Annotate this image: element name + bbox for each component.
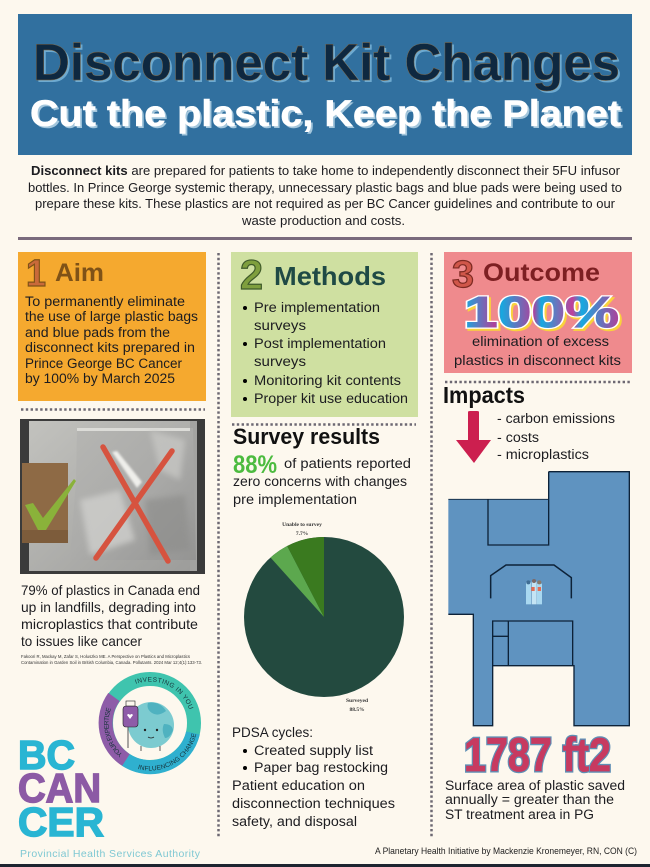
PDSA cycles: PDSA cycles:	[232, 725, 313, 740]
earth	[128, 702, 174, 751]
photo: paper bag and plastic bag	[20, 419, 205, 574]
aim text: the use of large plastic bags	[25, 309, 198, 324]
divider	[18, 237, 632, 240]
citation: Contamination in Garden Soil in British Columbia, Canada. Pollutants. 2024 Mar 12;4(1):133-73.	[21, 660, 202, 665]
aim text: and blue pads from the	[25, 325, 170, 340]
citation	[21, 654, 202, 665]
intro text: Disconnect kits are prepared for patients to take home to independently disconnect their 5FU infusor	[31, 164, 620, 178]
panel: outcome	[444, 252, 632, 373]
100 percent graphic: 100%	[466, 290, 621, 339]
slice: other	[270, 546, 324, 617]
plastics fact: microplastics that contribute	[21, 616, 198, 632]
survey stat: zero concerns with changes	[233, 474, 407, 489]
methods list: Monitoring kit contents	[254, 373, 401, 388]
plastics fact: to issues like cancer	[21, 633, 142, 649]
plastic bag	[70, 428, 196, 560]
title: Disconnect Kit Changes	[33, 34, 620, 92]
PDSA cycles: Created supply list	[254, 743, 373, 758]
methods heading: Methods	[274, 261, 386, 291]
impacts list: - carbon emissions	[497, 411, 615, 426]
PDSA cycles: Patient education on	[232, 778, 365, 793]
badge text	[104, 677, 196, 770]
surface area text: ST treatment area in PG	[445, 807, 594, 822]
impacts list: - microplastics	[497, 447, 589, 462]
PDSA cycles: Paper bag restocking	[254, 760, 388, 775]
big stat: 1787 ft2: 1787 ft2	[464, 728, 611, 781]
purple arc	[106, 697, 126, 760]
title banner	[18, 14, 632, 155]
100 percent graphic: 100%	[464, 288, 619, 337]
floor plan	[448, 472, 629, 726]
aim text	[25, 294, 198, 386]
plastics fact	[21, 582, 200, 649]
PDSA cycles: safety, and disposal	[232, 814, 357, 829]
subtitle: Cut the plastic, Keep the Planet	[30, 93, 621, 134]
outcome text: plastics in disconnect kits	[454, 353, 621, 368]
number 3: 3	[452, 254, 474, 296]
title shadow: Disconnect Kit Changes	[35, 36, 622, 94]
panel: methods	[231, 251, 418, 417]
logo: BC Cancer: CER	[18, 799, 104, 845]
pie label: unable to survey	[282, 522, 322, 537]
badge text: YOUR EXPERTISE	[104, 708, 122, 758]
aim text: To permanently eliminate	[25, 294, 185, 309]
logo subtitle: Provincial Health Services Authority	[20, 848, 201, 860]
intro text: waste production and costs.	[241, 214, 405, 228]
surface area text: annually = greater than the	[445, 792, 614, 807]
plastics fact: up in landfills, degrading into	[21, 599, 196, 615]
aim text: by 100% by March 2025	[25, 371, 175, 386]
big stat: 1787 ft2: 1787 ft2	[464, 728, 611, 781]
plastics fact: 79% of plastics in Canada end	[21, 582, 200, 598]
surface area text	[445, 778, 625, 822]
number 1: 1	[26, 253, 46, 295]
IV bag	[123, 701, 138, 748]
icon: down arrow	[456, 411, 491, 463]
outcome heading: Outcome	[483, 259, 600, 287]
impacts heading: Impacts	[443, 382, 525, 408]
check mark	[25, 479, 76, 530]
column separators	[21, 253, 630, 838]
PDSA cycles	[232, 725, 395, 829]
survey results heading: Survey results	[233, 424, 380, 449]
bottom edge strip	[0, 864, 650, 867]
survey stat: pre implementation	[233, 492, 357, 507]
subtitle shadow: Cut the plastic, Keep the Planet	[32, 95, 623, 136]
methods list: Post implementation	[254, 336, 386, 351]
100 percent graphic: 100%	[464, 288, 619, 337]
surface area text: Surface area of plastic saved	[445, 778, 625, 793]
citation: Fakoori R, Mackay M, Zafar S, Holuszko ME. A Perspective on Plastics and Microplastics	[21, 654, 190, 659]
survey stat: of patients reported	[284, 456, 411, 471]
survey stat: 88%	[233, 451, 277, 479]
red cross	[96, 447, 172, 561]
blue arc	[126, 733, 193, 767]
survey stat	[233, 451, 411, 507]
outcome text	[454, 334, 621, 368]
logo: BC Cancer: CAN	[18, 765, 101, 811]
pie label: surveyed	[346, 698, 368, 713]
panel: aim	[18, 252, 206, 401]
slice: unable to survey	[287, 537, 324, 617]
methods list	[243, 300, 408, 406]
logo: BC Cancer	[18, 732, 104, 845]
intro text: bottles. In Prince George systemic therapy, unnecessary plastic bags and blue pads were being used to	[28, 181, 622, 195]
methods list: Pre implementation	[254, 300, 380, 315]
aim text: Prince George BC Cancer	[25, 356, 182, 371]
pie label: unable to survey: 7.7%	[296, 531, 308, 537]
pie label: surveyed: 88.5%	[349, 707, 365, 713]
intro text: prepare these kits. These plastics are not required as per BC Cancer guidelines and contribute to our	[35, 197, 615, 211]
methods list: surveys	[254, 354, 306, 369]
methods list: Proper kit use education	[254, 391, 408, 406]
methods list: surveys	[254, 318, 306, 333]
intro text	[28, 164, 622, 228]
pie label: surveyed: Surveyed	[346, 698, 368, 704]
icon: care team	[526, 579, 542, 604]
impacts list: - costs	[497, 430, 539, 445]
impacts list	[497, 411, 615, 462]
100 percent graphic	[464, 288, 621, 339]
logo: BC Cancer: BC	[18, 732, 75, 778]
aim heading: Aim	[55, 259, 104, 287]
pie label: unable to survey: Unable to survey	[282, 522, 322, 528]
paper bag	[22, 463, 68, 543]
number 2: 2	[240, 251, 263, 298]
outcome text: elimination of excess	[472, 334, 609, 349]
badge: investing in you	[98, 672, 201, 774]
badge text: INVESTING IN YOU	[134, 677, 194, 709]
PDSA cycles: disconnection techniques	[232, 796, 395, 811]
badge text: INFLUENCING CHANGE	[138, 733, 196, 770]
aim text: disconnect kits prepared in	[25, 340, 195, 355]
floor plan outlines	[448, 472, 629, 726]
pie chart	[244, 522, 404, 713]
